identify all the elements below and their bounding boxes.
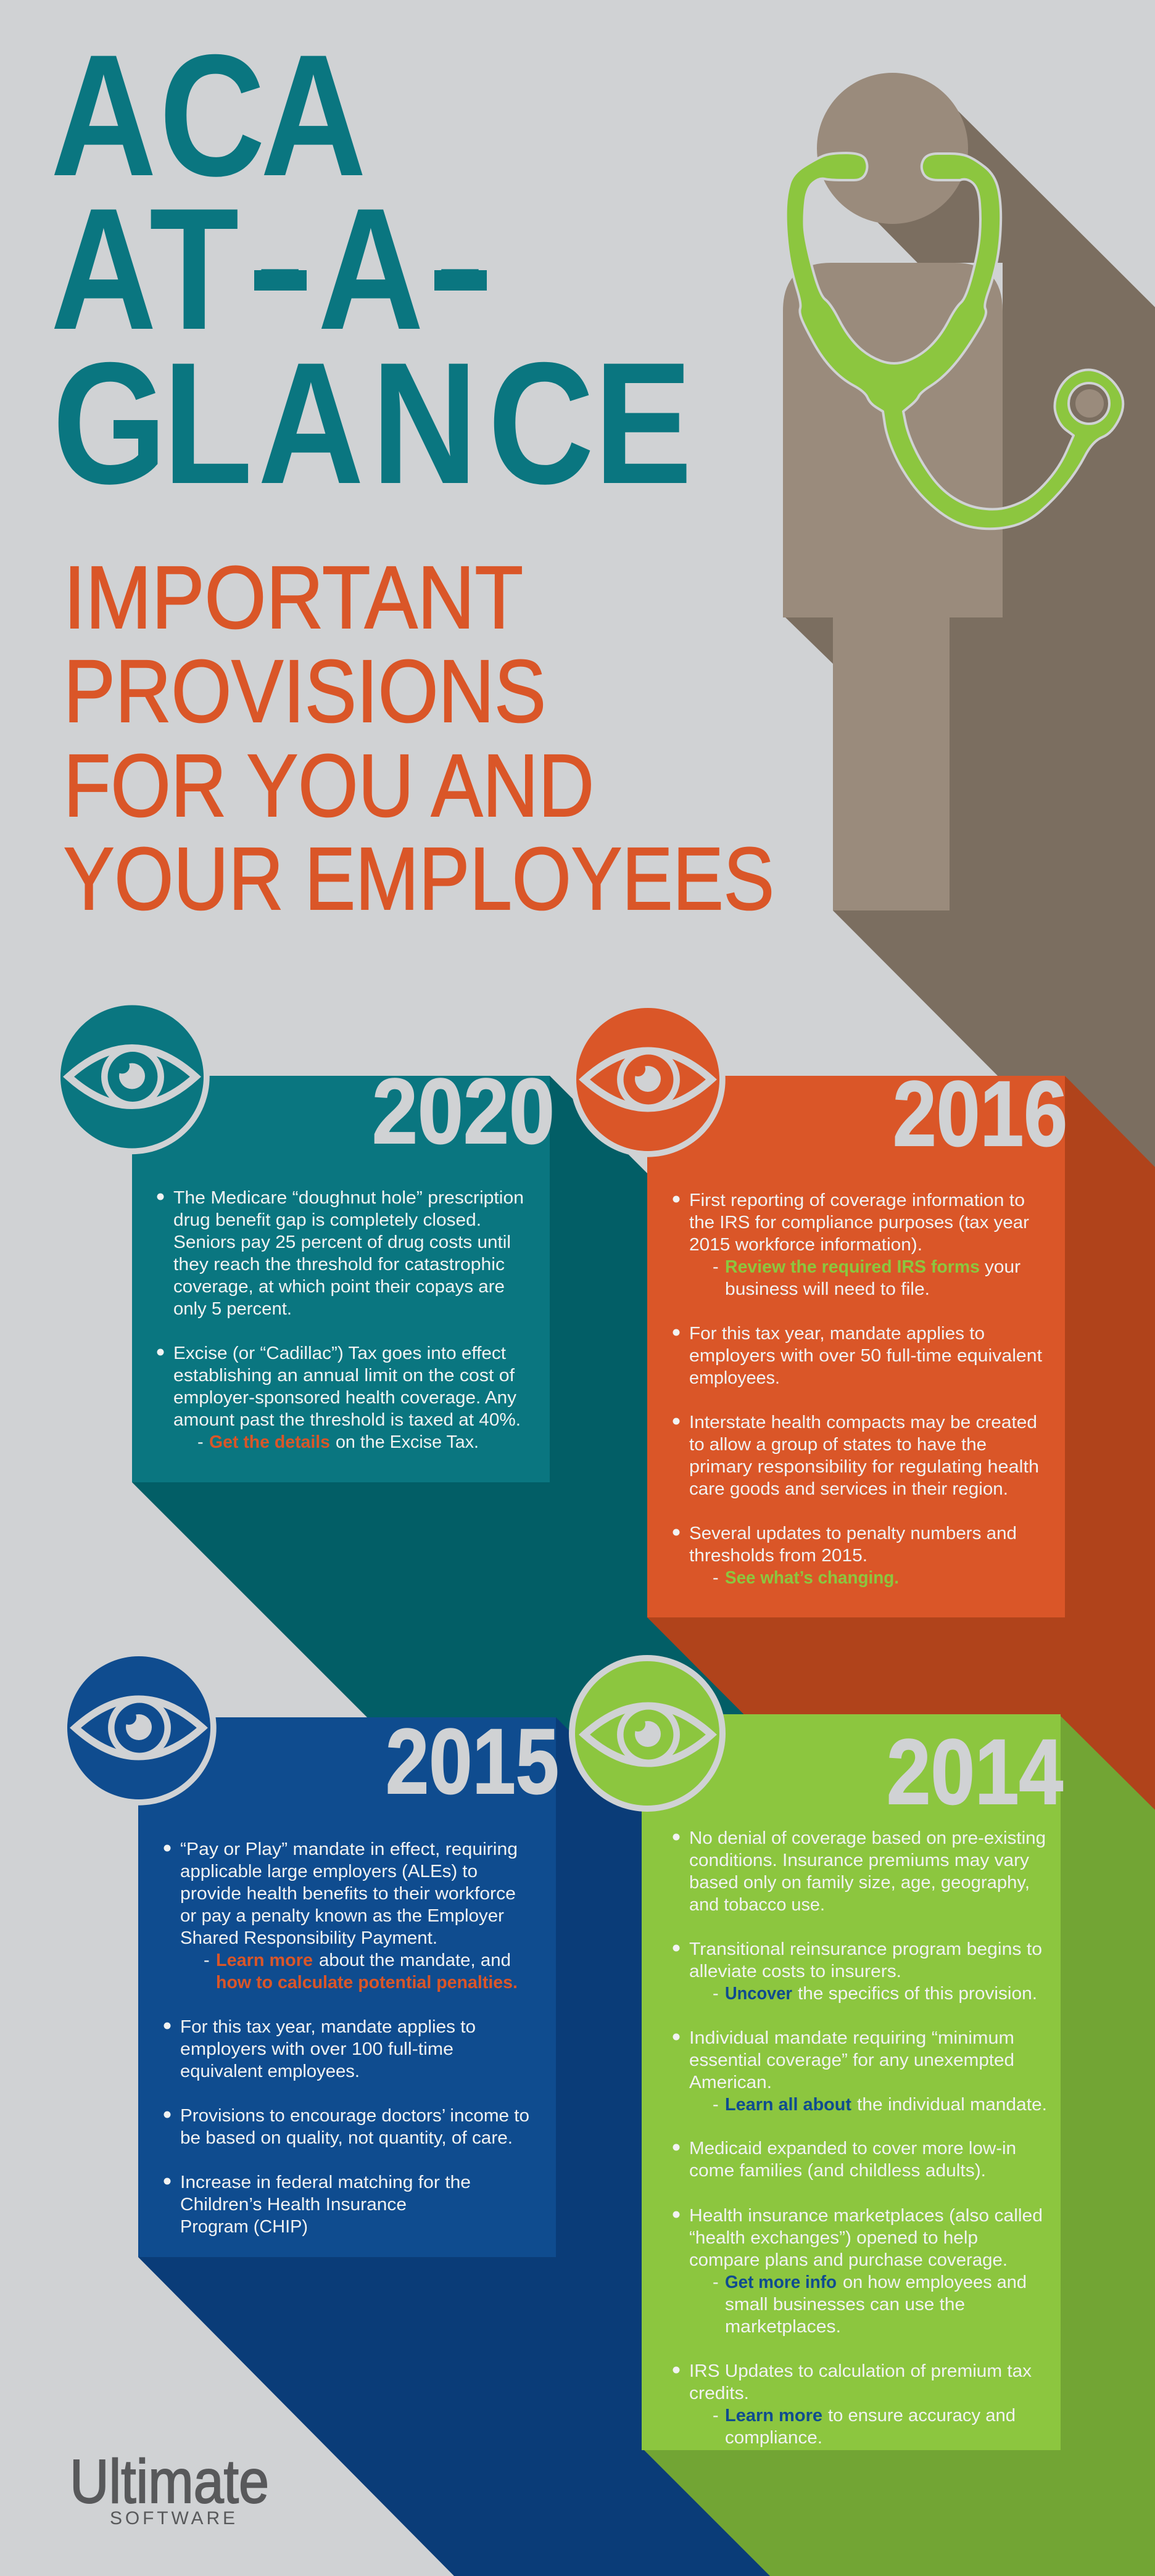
- panel: 2016: [570, 1002, 1155, 1974]
- 2014 provisions text: compare plans and purchase coverage.: [689, 2250, 1008, 2270]
- 2014 provisions text: and tobacco use.: [689, 1895, 825, 1915]
- 2016 eye badge: [570, 1002, 726, 1157]
- 2015 provisions text: Program (CHIP): [180, 2217, 308, 2237]
- subtitle: PROVISIONS: [64, 642, 546, 741]
- figure body: [783, 263, 1003, 910]
- 2014 provisions text: on how employees and: [843, 2273, 1027, 2292]
- 2016 provisions text: to allow a group of states to have the: [689, 1435, 987, 1455]
- subtitle: FOR YOU AND: [64, 736, 594, 835]
- 2015 provisions text: be based on quality, not quantity, of care.: [180, 2128, 513, 2148]
- 2015 provisions text: or pay a penalty known as the Employer: [180, 1906, 504, 1926]
- 2015 provisions text: employers with over 100 full-time: [180, 2039, 453, 2059]
- panel: 2015: [61, 1650, 802, 2576]
- 2014 provisions text: to ensure accuracy and: [828, 2406, 1016, 2425]
- 2020 year heading: 2020: [372, 1059, 555, 1163]
- subtitle: IMPORTANT: [64, 548, 523, 647]
- 2020 provisions text: Excise (or “Cadillac”) Tax goes into effect: [173, 1344, 506, 1363]
- 2016 provisions text: -: [713, 1257, 719, 1277]
- 2020 provisions text: The Medicare “doughnut hole” prescription: [173, 1188, 524, 1208]
- 2014 provisions text: -: [713, 1984, 719, 2004]
- 2015 year heading: 2015: [386, 1709, 559, 1813]
- 2014 provisions text: Learn all about: [725, 2095, 851, 2115]
- 2016 provisions text: the IRS for compliance purposes (tax year: [689, 1213, 1029, 1232]
- 2020 provisions text: coverage, at which point their copays are: [173, 1277, 505, 1297]
- 2014 provisions text: -: [713, 2406, 719, 2425]
- 2014 provisions text: “health exchanges”) opened to help: [689, 2228, 978, 2248]
- 2014 eye badge: [569, 1655, 726, 1812]
- subtitle: YOUR EMPLOYEES: [64, 829, 774, 928]
- 2014 provisions text: marketplaces.: [725, 2317, 841, 2337]
- 2016 provisions text: First reporting of coverage information to: [689, 1191, 1025, 1210]
- 2014 provisions text: -: [713, 2095, 719, 2115]
- 2015 provisions text: “Pay or Play” mandate in effect, requiring: [180, 1839, 518, 1859]
- 2015 provisions text: Shared Responsibility Payment.: [180, 1928, 437, 1948]
- 2015 panel shadow: [138, 1717, 802, 2576]
- 2020 provisions text: establishing an annual limit on the cost of: [173, 1366, 515, 1385]
- 2014 provisions text: American.: [689, 2073, 772, 2092]
- 2014 provisions text: Uncover: [725, 1984, 792, 2004]
- 2014 provisions text: compliance.: [725, 2428, 822, 2448]
- 2014 provisions text: Learn more: [725, 2406, 822, 2425]
- 2014 provisions text: the specifics of this provision.: [798, 1984, 1037, 2004]
- 2015 provisions text: equivalent employees.: [180, 2062, 360, 2081]
- 2014 provisions text: small businesses can use the: [725, 2295, 965, 2314]
- 2014 provisions text: essential coverage” for any unexempted: [689, 2050, 1014, 2070]
- 2015 provisions text: Increase in federal matching for the: [180, 2173, 471, 2192]
- 2014 provisions text: [673, 1828, 1047, 2448]
- doctor figure with stethoscope: [783, 73, 1155, 1172]
- panel: 2014: [569, 1655, 1155, 2576]
- 2015 provisions text: applicable large employers (ALEs) to: [180, 1862, 478, 1881]
- 2020 eye badge: [54, 999, 210, 1154]
- 2014 panel shadow: [644, 1716, 1155, 2576]
- 2016 provisions text: care goods and services in their region.: [689, 1479, 1008, 1499]
- 2014 provisions text: credits.: [689, 2384, 749, 2403]
- 2020 panel shadow: [132, 1076, 802, 1789]
- 2020 provisions text: Seniors pay 25 percent of drug costs until: [173, 1232, 511, 1252]
- 2016 provisions text: business will need to file.: [725, 1279, 930, 1299]
- 2016 provisions text: employers with over 50 full-time equivalent: [689, 1346, 1042, 1366]
- 2015 provisions text: Children’s Health Insurance: [180, 2195, 407, 2215]
- 2016 provisions text: 2015 workforce information).: [689, 1235, 922, 1255]
- 2016 provisions text: Several updates to penalty numbers and: [689, 1524, 1017, 1543]
- 2020 provisions text: they reach the threshold for catastrophic: [173, 1255, 505, 1274]
- 2016 provisions text: See what’s changing.: [725, 1568, 899, 1588]
- 2016 year heading: 2016: [893, 1062, 1067, 1165]
- 2014 provisions text: based only on family size, age, geography,: [689, 1873, 1030, 1893]
- title: ACA: [51, 19, 366, 212]
- 2015 eye badge: [61, 1650, 217, 1806]
- 2015 provisions text: -: [204, 1951, 210, 1970]
- 2020 provisions text: -: [197, 1432, 204, 1452]
- 2015 provisions text: For this tax year, mandate applies to: [180, 2017, 476, 2037]
- panel: 2020: [54, 999, 802, 1789]
- 2015 provisions text: provide health benefits to their workforce: [180, 1884, 516, 1904]
- figure head: [817, 73, 968, 224]
- 2014 provisions text: Medicaid expanded to cover more low-in: [689, 2139, 1016, 2158]
- 2016 provisions text: For this tax year, mandate applies to: [689, 1324, 985, 1344]
- 2015 provisions text: about the mandate, and: [319, 1951, 511, 1970]
- 2016 provisions text: employees.: [689, 1368, 780, 1388]
- 2016 provisions text: your: [985, 1257, 1020, 1277]
- 2014 provisions text: IRS Updates to calculation of premium tax: [689, 2361, 1032, 2381]
- 2014 provisions text: the individual mandate.: [857, 2095, 1047, 2115]
- 2014 provisions text: Health insurance marketplaces (also called: [689, 2206, 1043, 2226]
- 2014 provisions text: Get more info: [725, 2273, 837, 2292]
- 2015 panel background: [138, 1717, 556, 2257]
- title: AT-A-: [51, 168, 484, 366]
- logo: Ultimate Software: Ultimate: [70, 2447, 269, 2516]
- subtitle: [64, 548, 774, 928]
- 2014 provisions text: Individual mandate requiring “minimum: [689, 2028, 1014, 2048]
- 2015 provisions text: how to calculate potential penalties.: [216, 1973, 518, 1992]
- 2014 provisions text: -: [713, 2273, 719, 2292]
- figure long shadow: [785, 110, 1155, 1172]
- 2020 provisions text: drug benefit gap is completely closed.: [173, 1210, 481, 1230]
- 2020 provisions text: on the Excise Tax.: [336, 1432, 479, 1452]
- 2016 panel background: [647, 1076, 1065, 1617]
- 2020 provisions text: only 5 percent.: [173, 1299, 292, 1319]
- 2016 panel shadow: [647, 1076, 1155, 1974]
- 2020 provisions text: employer-sponsored health coverage. Any: [173, 1388, 516, 1408]
- 2014 year heading: 2014: [887, 1720, 1063, 1823]
- 2016 provisions text: primary responsibility for regulating health: [689, 1457, 1039, 1477]
- 2016 provisions text: Review the required IRS forms: [725, 1257, 980, 1277]
- 2020 panel background: [132, 1076, 550, 1482]
- 2014 provisions text: conditions. Insurance premiums may vary: [689, 1851, 1030, 1870]
- title: [51, 19, 692, 520]
- 2020 provisions text: [157, 1188, 524, 1452]
- 2020 provisions text: Get the details: [209, 1432, 330, 1452]
- 2016 provisions text: [673, 1191, 1042, 1588]
- 2014 provisions text: come families (and childless adults).: [689, 2161, 986, 2181]
- 2014 panel background: [642, 1714, 1061, 2450]
- 2014 provisions text: alleviate costs to insurers.: [689, 1962, 901, 1981]
- 2015 provisions text: [164, 1839, 529, 2237]
- 2015 provisions text: Learn more: [216, 1951, 313, 1970]
- 2016 provisions text: Interstate health compacts may be created: [689, 1413, 1037, 1432]
- 2016 provisions text: thresholds from 2015.: [689, 1546, 867, 1566]
- 2015 provisions text: Provisions to encourage doctors’ income to: [180, 2106, 529, 2126]
- 2020 provisions text: amount past the threshold is taxed at 40%.: [173, 1410, 521, 1430]
- 2014 provisions text: Transitional reinsurance program begins to: [689, 1939, 1042, 1959]
- logo: Ultimate Software: SOFTWARE: [110, 2508, 235, 2529]
- 2014 provisions text: No denial of coverage based on pre-existing: [689, 1828, 1046, 1848]
- icon: stethoscope: [786, 153, 1123, 529]
- 2016 provisions text: -: [713, 1568, 719, 1588]
- title: GLANCE: [52, 326, 692, 520]
